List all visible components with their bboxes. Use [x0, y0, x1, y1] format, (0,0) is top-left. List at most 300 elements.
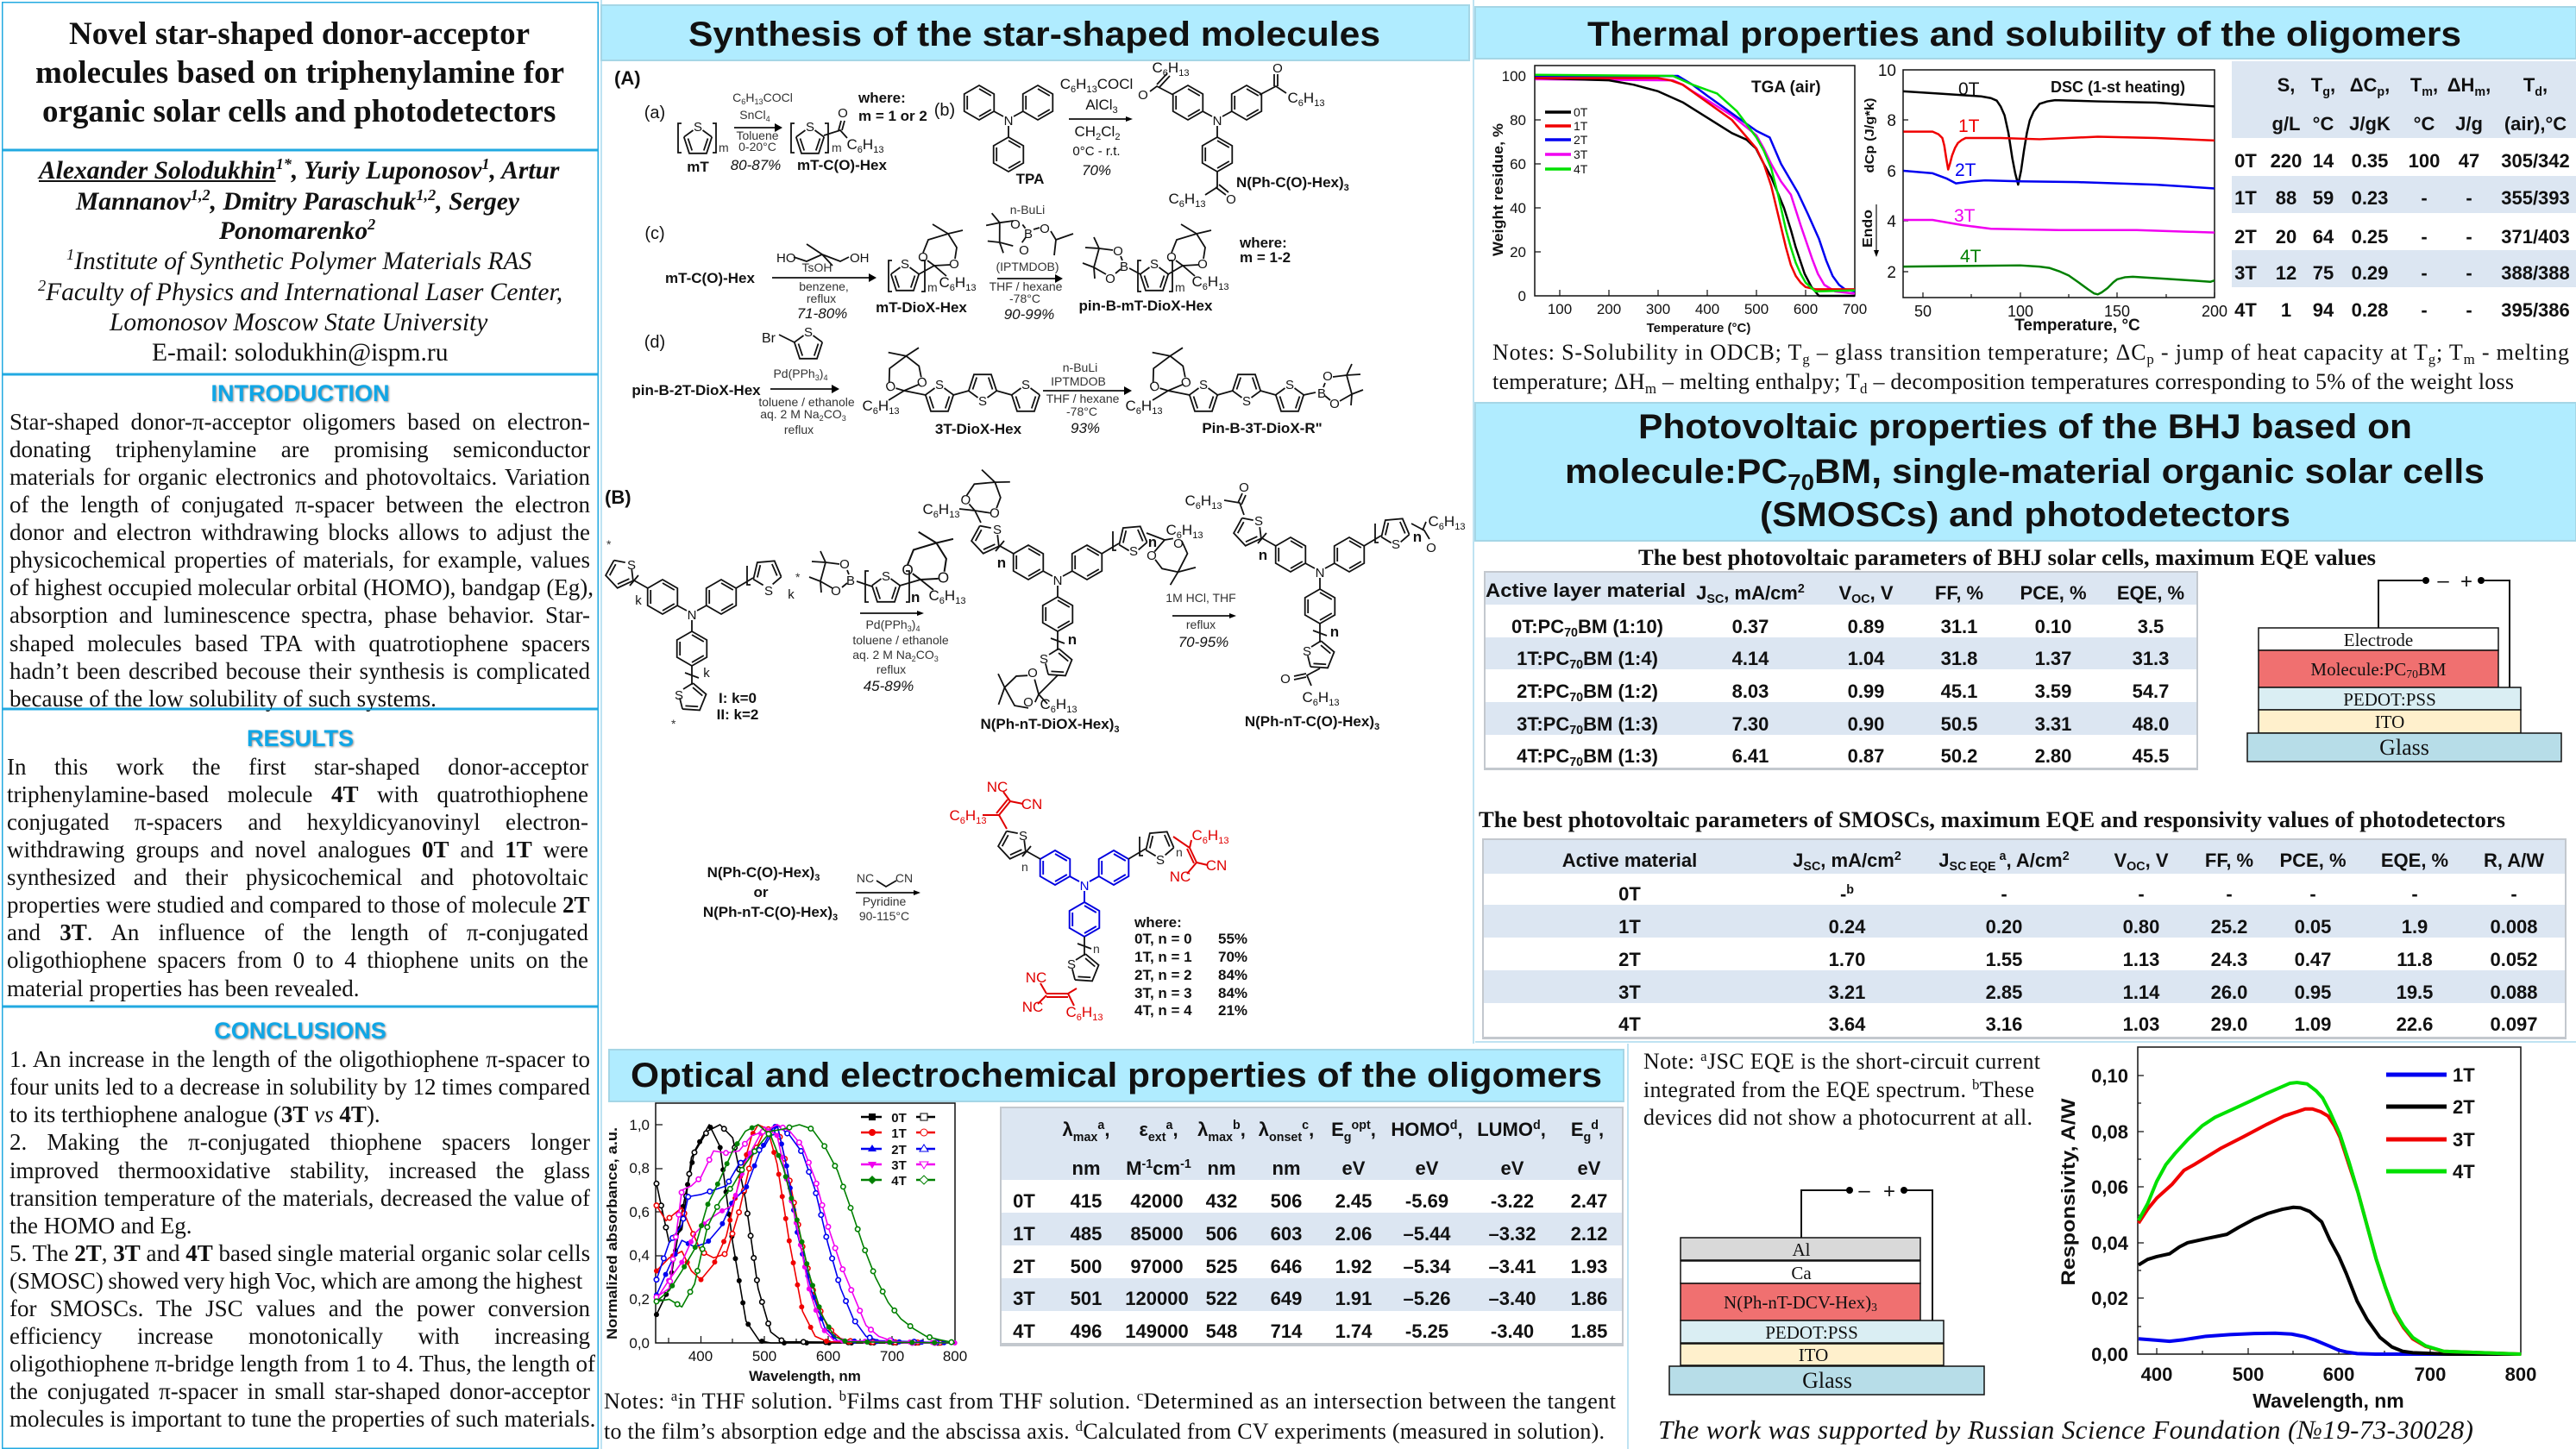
scheme B: suzuki arrow and conditions: reflux: [876, 662, 906, 676]
reaction b: COCl: [1097, 76, 1133, 92]
panel: title: Novel star-shaped donor-acceptor: [69, 16, 530, 52]
panel: title: [2, 2, 599, 150]
table: thermal and solubility: ,: [2330, 74, 2335, 96]
heading: synthesis: [601, 5, 1469, 60]
scheme B: starting core: II: k=2: [717, 706, 758, 723]
table: optical and electrochemical: –5.26: [1403, 1288, 1451, 1309]
notes: optical: c: [1137, 1388, 1143, 1404]
table: optical and electrochemical: 603: [1271, 1223, 1302, 1245]
table: SMOSC and photodetectors: 25.2: [2211, 916, 2247, 938]
table: optical and electrochemical: 4T: [1013, 1320, 1035, 1342]
table: SMOSC and photodetectors: 1.03: [2123, 1013, 2159, 1035]
scheme B: boronic ester reagent: C: [928, 587, 939, 604]
reaction d: 13: [1152, 406, 1163, 417]
scheme B: N(Ph-nT-DiOX-Hex)3: S: [993, 523, 1002, 537]
scheme B: suzuki arrow and conditions: CO: [916, 648, 934, 662]
panel: authors and affiliations: Ponomarenko2: [219, 216, 375, 245]
panel: results: RESULTS: [247, 725, 354, 751]
reaction d: 3: [815, 373, 820, 382]
panel: conclusions: the conjugated π-spacer in small star-shaped donor-acceptor: [9, 1378, 590, 1404]
scheme B: N(Ph-nT-C(O)-Hex)3: S: [1254, 514, 1263, 529]
table: BHJ solar cells: FF, %: [1935, 582, 1983, 604]
scheme B: knoevenagel reagents: CN: [895, 871, 913, 885]
legend: absorbance: 2T: [891, 1143, 907, 1157]
scheme B: N(Ph-nT-C(O)-Hex)3: C: [1428, 513, 1439, 530]
table: optical and electrochemical: ,: [1309, 1119, 1314, 1140]
reaction a: mT: [687, 159, 709, 175]
reaction d: aq. 2 M Na: [760, 407, 820, 421]
table: optical and electrochemical: nm: [1272, 1157, 1301, 1179]
table: SMOSC and photodetectors: 24.3: [2211, 949, 2247, 970]
table: optical and electrochemical: -3.40: [1491, 1320, 1534, 1342]
table: thermal and solubility: 3T: [2234, 262, 2257, 284]
table: thermal and solubility: ΔC: [2350, 74, 2377, 96]
reaction a: C: [846, 136, 858, 153]
table: thermal and solubility: J/g: [2455, 113, 2483, 135]
notes: thermal: d: [1860, 380, 1868, 397]
panel: results: In this work the first star-shaped donor-acceptor: [7, 754, 588, 780]
reaction d: -78°C: [1066, 405, 1097, 418]
chart: normalized absorbance: 800: [943, 1348, 967, 1364]
yield list: 84%: [1218, 985, 1247, 1001]
reaction d: THF / hexane: [1046, 392, 1120, 405]
table: optical and electrochemical: b: [1233, 1119, 1241, 1132]
chart: DSC: 200: [2202, 303, 2227, 320]
reaction b: N(Ph-C(O)-Hex): [1236, 174, 1344, 191]
table: optical and electrochemical: 714: [1271, 1320, 1303, 1342]
table: optical and electrochemical: g: [1344, 1131, 1352, 1145]
panel: results: conjugated π-spacers and hexyldicyanovinyl electron-: [7, 809, 588, 835]
reaction c: n-BuLi: [1010, 203, 1045, 216]
table: thermal and solubility: T: [2410, 74, 2422, 96]
notes: optical: b: [839, 1388, 846, 1404]
scheme B: starting core: k: [788, 587, 795, 602]
table: optical and electrochemical: eV: [1501, 1157, 1524, 1179]
table: optical and electrochemical: cm: [1153, 1157, 1180, 1179]
panel: results: properties were studied and compared to those of molecule 2T: [7, 892, 590, 918]
chart: normalized absorbance: 500: [752, 1348, 776, 1364]
reaction c: S: [901, 257, 909, 272]
reaction b: 3: [1113, 105, 1118, 116]
table: optical and electrochemical: ext: [1148, 1131, 1166, 1145]
scheme B: knoevenagel reagents: N(Ph-C(O)-Hex): [707, 864, 814, 881]
table: BHJ solar cells: 3T:PC: [1517, 713, 1569, 735]
table: thermal and solubility: 1: [2281, 299, 2291, 321]
scheme B: boronic ester reagent: [809, 532, 966, 606]
table: optical and electrochemical: eV: [1342, 1157, 1366, 1179]
notes: thermal: temperature; ΔH: [1492, 369, 1645, 394]
scheme B: N(Ph-nT-DiOX-Hex)3: 6: [1177, 530, 1182, 541]
reaction d: S: [804, 325, 813, 340]
reaction d: (d): [644, 333, 665, 352]
table: optical and electrochemical: -5.69: [1405, 1190, 1448, 1212]
scheme B: starting core: S: [764, 584, 773, 599]
table: BHJ solar cells: 3.31: [2035, 713, 2071, 735]
reaction c: m: [1175, 280, 1185, 294]
panel: conclusions: CONCLUSIONS: [214, 1018, 386, 1044]
table: SMOSC and photodetectors: [1482, 838, 2567, 1039]
table: optical and electrochemical: 3T: [1013, 1288, 1035, 1309]
table: SMOSC and photodetectors: -: [2138, 883, 2145, 905]
table: optical and electrochemical: a: [1166, 1119, 1174, 1132]
scheme B: N(Ph-nT-DiOX-Hex)3: 13: [1066, 705, 1078, 715]
legend: responsivity: [2386, 1064, 2475, 1182]
reaction d: O: [1147, 379, 1162, 396]
scheme B: knoevenagel reagents: [703, 864, 920, 923]
device stack: SMOSC: Al: [1793, 1239, 1811, 1260]
table: thermal and solubility: 0.35: [2352, 150, 2388, 172]
device stack: SMOSC: [1669, 1179, 1984, 1395]
reaction c: H: [955, 274, 965, 291]
chart: responsivity: Wavelength, nm: [2252, 1389, 2404, 1412]
table: optical and electrochemical: 97000: [1130, 1256, 1184, 1277]
notes: thermal: g: [1802, 351, 1810, 367]
heading: photovoltaic: (SMOSCs) and photodetectors: [1760, 496, 2290, 534]
note: SMOSC: a: [1700, 1048, 1707, 1064]
scheme B: suzuki arrow and conditions: toluene / ethanole: [852, 633, 949, 647]
heading: photovoltaic: [1475, 403, 2576, 541]
reaction b: H: [1168, 60, 1178, 76]
device stack: SMOSC: +: [1883, 1180, 1895, 1203]
table: optical and electrochemical: ,: [1599, 1119, 1604, 1140]
table: thermal and solubility: ,: [2433, 74, 2438, 96]
scheme B: starting core: S: [675, 688, 683, 703]
scheme B: boronic ester reagent: O: [831, 584, 841, 599]
scheme B: N(Ph-nT-DiOX-Hex)3: C: [922, 501, 933, 518]
table: SMOSC and photodetectors: -: [2309, 883, 2316, 905]
reaction a: O: [838, 106, 848, 121]
table: SMOSC and photodetectors: 3.16: [1986, 1013, 2022, 1035]
scheme B: final star molecule: n: [1176, 845, 1183, 859]
table: thermal and solubility: m: [2422, 85, 2433, 99]
note: SMOSC: [1643, 1048, 2041, 1130]
device stack: SMOSC: 3: [1871, 1301, 1877, 1314]
table: optical and electrochemical: 485: [1071, 1223, 1102, 1245]
reaction a: where:: [858, 90, 906, 106]
chart: normalized absorbance: 700: [880, 1348, 904, 1364]
scheme B: N(Ph-nT-DiOX-Hex)3: H: [1182, 522, 1192, 538]
table: optical and electrochemical: ,: [1371, 1119, 1376, 1140]
reaction c: O: [1019, 243, 1029, 258]
panel: conclusions: molecules is important to tune the properties of such materials.: [9, 1406, 595, 1432]
note: SMOSC: devices did not show a photocurrent at all.: [1643, 1105, 2033, 1130]
reaction d: pin-B-2T-DioX-Hex: [631, 382, 761, 398]
scheme B: final star molecule: NC: [1026, 969, 1046, 986]
table: thermal and solubility: T: [2311, 74, 2322, 96]
reaction d: C: [1125, 398, 1136, 414]
notes: optical: [604, 1388, 1617, 1444]
table: SMOSC and photodetectors: 1T: [1618, 916, 1641, 938]
table: thermal and solubility: 1T: [2234, 187, 2257, 209]
table: thermal and solubility: 0.28: [2352, 299, 2388, 321]
reaction a: 13: [873, 145, 884, 155]
table: thermal and solubility: d: [2535, 85, 2542, 99]
yield list: 4T, n = 4: [1134, 1002, 1192, 1019]
yield list: 84%: [1218, 967, 1247, 983]
table: thermal and solubility: ,: [2485, 74, 2491, 96]
chart: TGA: 20: [1510, 244, 1526, 260]
chart: DSC: 2T: [1955, 160, 1976, 180]
table: BHJ solar cells: [1484, 571, 2198, 770]
table: optical and electrochemical: g: [1584, 1131, 1591, 1145]
device stack: BHJ: [2247, 569, 2561, 762]
scheme B: final star molecule: 13: [1218, 836, 1229, 846]
table: thermal and solubility: [2232, 61, 2576, 321]
reaction a: 6: [741, 97, 745, 106]
reaction c: 13: [1218, 282, 1229, 292]
reaction b: 13: [1178, 68, 1190, 78]
scheme B: final star molecule: 6: [960, 816, 965, 826]
reaction d: [631, 325, 1363, 437]
chart: DSC: 6: [1887, 163, 1896, 181]
chart: TGA: 600: [1794, 301, 1818, 317]
table: thermal and solubility: -: [2421, 226, 2428, 248]
scheme B: N(Ph-nT-C(O)-Hex)3: 6: [1196, 501, 1201, 511]
scheme B: N(Ph-nT-C(O)-Hex)3: H: [1444, 513, 1454, 530]
table: optical and electrochemical: max: [1208, 1131, 1233, 1145]
legend: absorbance: [861, 1111, 935, 1189]
chart: DSC: 2: [1887, 264, 1896, 282]
panel: introduction: absorption and luminescence spectra, phase behavior. Star-: [9, 602, 590, 628]
scheme B: N(Ph-nT-DiOX-Hex)3: S: [1129, 544, 1138, 559]
reaction c: where:: [1239, 235, 1287, 251]
table: BHJ solar cells: 0.10: [2035, 616, 2071, 637]
table: optical and electrochemical: 1T: [1013, 1223, 1035, 1245]
chart: normalized absorbance: 400: [688, 1348, 713, 1364]
reaction a: m: [719, 141, 729, 154]
reaction d: C: [862, 398, 873, 414]
panel: introduction: hadn’t been described becouse their synthesis is complicated: [9, 658, 590, 684]
table: optical and electrochemical: 649: [1271, 1288, 1302, 1309]
reaction b: 0°C - r.t.: [1072, 144, 1121, 159]
scheme B: final star molecule: H: [965, 807, 976, 824]
table: optical and electrochemical: 149000: [1125, 1320, 1189, 1342]
table: thermal and solubility: °C: [2414, 113, 2435, 135]
reaction c: O: [949, 257, 959, 272]
reaction d: Br: [762, 331, 776, 346]
scheme B: N(Ph-nT-DiOX-Hex)3: 13: [1192, 530, 1203, 541]
table: BHJ solar cells: 31.3: [2133, 648, 2169, 669]
scheme B: suzuki arrow and conditions: ): [912, 618, 915, 631]
panel: introduction: donating triphenylamine are promising semiconductor: [9, 436, 590, 462]
yield list: 70%: [1218, 949, 1247, 965]
table: optical and electrochemical: 500: [1071, 1256, 1102, 1277]
chart: TGA: 300: [1646, 301, 1670, 317]
table: SMOSC and photodetectors: SC EQE: [1950, 860, 1996, 874]
table: optical and electrochemical: -1: [1142, 1157, 1153, 1171]
heading: photovoltaic: molecule:PC: [1565, 453, 1774, 491]
table: BHJ solar cells: 2T:PC: [1517, 681, 1569, 702]
heading: photovoltaic: Photovoltaic properties of the BHJ based on: [1638, 408, 2412, 446]
notes: thermal: m: [1645, 380, 1656, 397]
table: optical and electrochemical: eV: [1416, 1157, 1439, 1179]
table: SMOSC and photodetectors: -: [2510, 883, 2517, 905]
notes: thermal: - melting: [2476, 340, 2569, 365]
table: BHJ solar cells: 0.37: [1732, 616, 1769, 637]
reaction d: toluene / ethanole: [758, 395, 855, 409]
device stack: BHJ: PEDOT:PSS: [2343, 689, 2436, 710]
panel: introduction: [2, 374, 599, 709]
table: optical and electrochemical: ε: [1139, 1119, 1148, 1140]
table: BHJ solar cells: BM (1:4): [1583, 648, 1658, 669]
legend: responsivity: 4T: [2453, 1161, 2475, 1182]
scheme B: final star molecule: 13: [976, 816, 987, 826]
scheme B: N(Ph-nT-DiOX-Hex)3: O: [1027, 666, 1038, 681]
notes: optical: Calculated from CV experiments (measured in solution).: [1083, 1419, 1605, 1444]
reaction a: COCl: [763, 91, 793, 104]
table: thermal and solubility: 14: [2313, 150, 2334, 172]
device stack: BHJ: Molecule:PC: [2310, 659, 2406, 680]
reaction c: (c): [644, 224, 665, 243]
table: BHJ solar cells: J: [1696, 582, 1706, 604]
chart: normalized absorbance: 0,4: [629, 1247, 650, 1264]
table: BHJ solar cells: SC: [1706, 593, 1724, 606]
table: thermal and solubility: 20: [2276, 226, 2296, 248]
yield list: 0T, n = 0: [1134, 931, 1192, 947]
table: SMOSC and photodetectors: 0.95: [2295, 982, 2331, 1003]
reaction a: S: [806, 120, 814, 135]
chart: normalized absorbance: 600: [816, 1348, 840, 1364]
scheme B: N(Ph-nT-C(O)-Hex)3: n: [1330, 624, 1339, 640]
notes: optical: d: [1076, 1418, 1084, 1434]
table: BHJ solar cells: OC: [1851, 593, 1870, 606]
reaction c: OH: [850, 251, 870, 266]
table: BHJ solar cells: 8.03: [1732, 681, 1769, 702]
reaction c: [644, 203, 1291, 323]
table: BHJ solar cells: 31.1: [1941, 616, 1977, 637]
scheme B: final star molecule: N: [1080, 879, 1089, 894]
table: SMOSC and photodetectors: FF, %: [2205, 850, 2253, 871]
chart: DSC: 10: [1878, 62, 1896, 80]
scheme B: suzuki arrow and conditions: Pd(PPh: [865, 618, 908, 631]
table: optical and electrochemical: -5.25: [1405, 1320, 1448, 1342]
device stack: BHJ: 70: [2406, 668, 2418, 681]
legend: TGA: 0T: [1574, 105, 1588, 119]
table: thermal and solubility: T: [2523, 74, 2535, 96]
scheme B: N(Ph-nT-C(O)-Hex)3: C: [1302, 689, 1313, 706]
chart: normalized absorbance: 0,2: [629, 1291, 650, 1308]
notes: thermal: – glass transition temperature; ΔC: [1811, 340, 2146, 365]
table: optical and electrochemical: 2.47: [1571, 1190, 1607, 1212]
table: thermal and solubility: 388/388: [2501, 262, 2570, 284]
scheme B: N(Ph-nT-C(O)-Hex)3: n: [1413, 529, 1422, 545]
scheme B: N(Ph-nT-C(O)-Hex)3: 13: [1329, 698, 1340, 708]
scheme B: final star molecule: H: [1208, 827, 1218, 844]
scheme B: final star molecule: n: [1021, 860, 1028, 874]
panel: authors and affiliations: Alexander Solodukhin1*, Yuriy Luponosov1, Artur: [39, 155, 559, 185]
scheme B: N(Ph-nT-C(O)-Hex)3: N: [1316, 566, 1324, 580]
table: SMOSC and photodetectors: 0.052: [2490, 949, 2538, 970]
notes: thermal: – decomposition temperatures corresponding to 5% of the weight loss: [1868, 369, 2514, 394]
panel: results: withdrawing groups and novel analogues 0T and 1T were: [7, 837, 588, 862]
table: optical and electrochemical: 496: [1071, 1320, 1102, 1342]
scheme B: N(Ph-nT-DiOX-Hex)3: 6: [933, 510, 939, 520]
scheme B: starting core: [602, 537, 801, 731]
scheme B: starting core: N: [688, 608, 696, 623]
reaction a: 0-20°C: [738, 140, 776, 154]
table: optical and electrochemical: 2.45: [1335, 1190, 1372, 1212]
device stack: SMOSC: Glass: [1802, 1368, 1852, 1393]
panel: results: synthesized and their physicochemical and photovoltaic: [7, 864, 588, 890]
table: BHJ solar cells: 0.99: [1848, 681, 1884, 702]
table: thermal and solubility: 0.25: [2352, 226, 2388, 248]
table: thermal and solubility: -: [2466, 187, 2472, 209]
scheme B: suzuki arrow and conditions: 3: [908, 624, 912, 633]
chart: responsivity: [2058, 1047, 2536, 1412]
scheme B: starting core: *: [671, 717, 676, 731]
table: optical and electrochemical: 506: [1271, 1190, 1302, 1212]
scheme B: N(Ph-nT-DiOX-Hex)3: O: [988, 505, 1001, 522]
reaction c: 71-80%: [797, 305, 847, 322]
table: optical and electrochemical: 42000: [1130, 1190, 1184, 1212]
chart: DSC: 1T: [1958, 116, 1980, 136]
reaction b: Cl: [1101, 123, 1115, 140]
table: thermal and solubility: p: [2377, 85, 2384, 99]
table: optical and electrochemical: c: [1302, 1119, 1309, 1132]
table: optical and electrochemical: 120000: [1125, 1288, 1189, 1309]
table: optical and electrochemical: 415: [1071, 1190, 1102, 1212]
table: optical and electrochemical: ,: [1241, 1119, 1246, 1140]
reaction a: m = 1 or 2: [858, 108, 927, 124]
scheme B: N(Ph-nT-C(O)-Hex)3: C: [1184, 492, 1196, 509]
chart: TGA: 40: [1510, 200, 1526, 216]
scheme B: hydrolysis arrow: 1M HCl, THF: [1165, 591, 1236, 605]
table: thermal and solubility: ,: [2384, 74, 2390, 96]
table: optical and electrochemical: λ: [1063, 1119, 1073, 1140]
table: SMOSC and photodetectors: 2.85: [1986, 982, 2022, 1003]
table: thermal and solubility: 0.23: [2352, 187, 2388, 209]
note: SMOSC: Note:: [1643, 1049, 1694, 1074]
reaction c: TsOH: [802, 260, 832, 274]
legend: absorbance: 4T: [891, 1174, 907, 1189]
chart: DSC: 150: [2104, 303, 2130, 320]
reaction a: (a): [644, 104, 665, 122]
table: SMOSC and photodetectors: 0.20: [1986, 916, 2022, 938]
table: thermal and solubility: °C: [2313, 113, 2334, 135]
table: SMOSC and photodetectors: R, A/W: [2484, 850, 2544, 871]
reaction d: S: [1021, 378, 1030, 392]
panel: conclusions: 1. An increase in the length of the oligothiophene π-spacer to: [9, 1046, 590, 1072]
chart: DSC: 50: [1914, 303, 1932, 320]
chart: responsivity: 700: [2415, 1364, 2446, 1385]
reaction b: 6: [1298, 98, 1304, 109]
reaction c: O: [1197, 257, 1208, 272]
reaction d: O: [1323, 369, 1333, 384]
reaction d: S: [1242, 394, 1251, 409]
reaction d: ): [820, 367, 823, 380]
reaction b: 70%: [1082, 162, 1111, 179]
table: SMOSC and photodetectors: PCE, %: [2279, 850, 2347, 871]
scheme B: N(Ph-nT-C(O)-Hex)3: 6: [1439, 522, 1444, 532]
scheme B: final star molecule: C: [1191, 827, 1203, 844]
chart: DSC: 4T: [1960, 247, 1982, 267]
scheme B: final star molecule: 13: [1092, 1013, 1103, 1023]
scheme B: knoevenagel reagents: 3: [832, 913, 838, 923]
chart: responsivity: Responsivity, A/W: [2058, 1098, 2079, 1285]
scheme B: boronic ester reagent: O: [839, 557, 850, 572]
reaction a: S: [694, 120, 702, 135]
table: thermal and solubility: -: [2466, 262, 2472, 284]
table: SMOSC and photodetectors: V: [2114, 850, 2127, 871]
table: optical and electrochemical: LUMO: [1477, 1119, 1533, 1140]
reaction d: O: [915, 374, 929, 392]
reaction d: O: [1179, 374, 1193, 392]
reaction b: C: [1060, 76, 1071, 92]
panel: conclusions: efficiency increase monotonically with increasing: [9, 1323, 590, 1349]
panel: introduction: physicochemical properties of materials, for example, values: [9, 547, 590, 573]
chart: DSC: 3T: [1954, 206, 1976, 226]
table: BHJ solar cells: 70: [1569, 756, 1583, 769]
